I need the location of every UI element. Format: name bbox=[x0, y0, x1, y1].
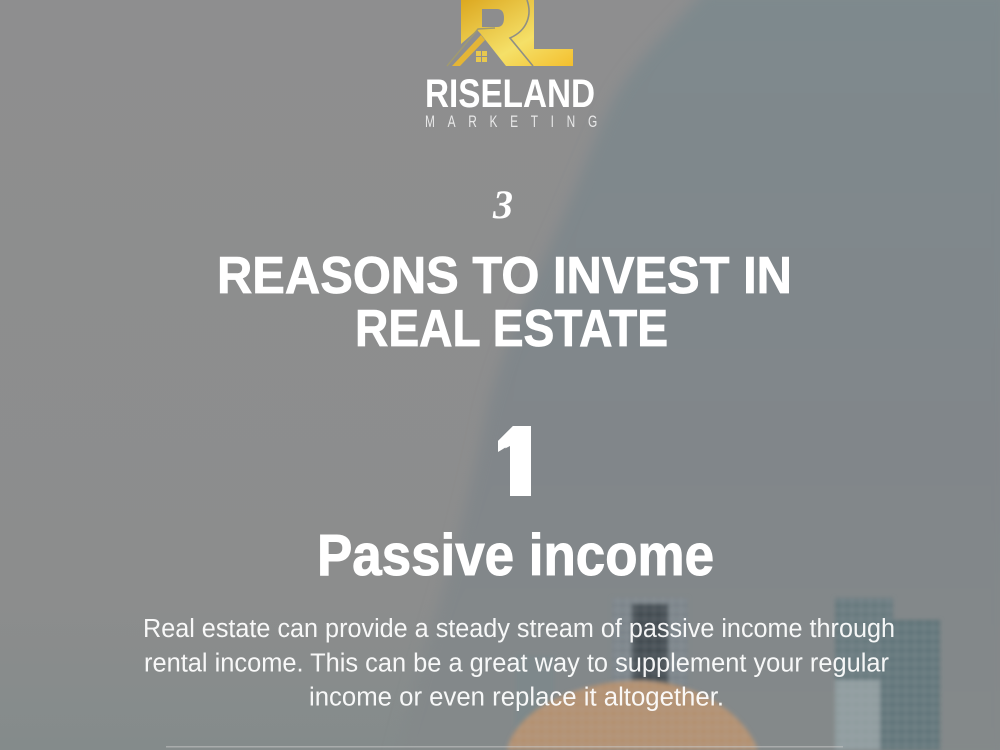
background photo: skyline bbox=[507, 598, 940, 750]
reason number: 1 bbox=[487, 403, 545, 519]
reason body text bbox=[143, 615, 895, 712]
reason heading: Passive income bbox=[317, 523, 714, 588]
title: REAL ESTATE bbox=[355, 300, 668, 358]
background photo: figure silhouette bbox=[395, 0, 1000, 750]
reason body text: rental income. This can be a great way to supplement your regular bbox=[144, 650, 889, 678]
title bbox=[217, 247, 792, 358]
logo mark: house window bbox=[476, 51, 487, 62]
logo wordmark: RISELAND bbox=[425, 72, 595, 116]
bottom divider line bbox=[166, 746, 843, 748]
orange dome building bbox=[507, 680, 758, 750]
title: REASONS TO INVEST IN bbox=[217, 247, 792, 305]
logo mark: gold RL with roof bbox=[447, 0, 573, 66]
reason body text: income or even replace it altogether. bbox=[309, 684, 724, 712]
logo bbox=[425, 0, 597, 132]
script numeral 3: 3 bbox=[492, 182, 513, 227]
logo sub-wordmark: MARKETING bbox=[425, 113, 597, 132]
reason body text: Real estate can provide a steady stream of passive income through bbox=[143, 615, 895, 643]
